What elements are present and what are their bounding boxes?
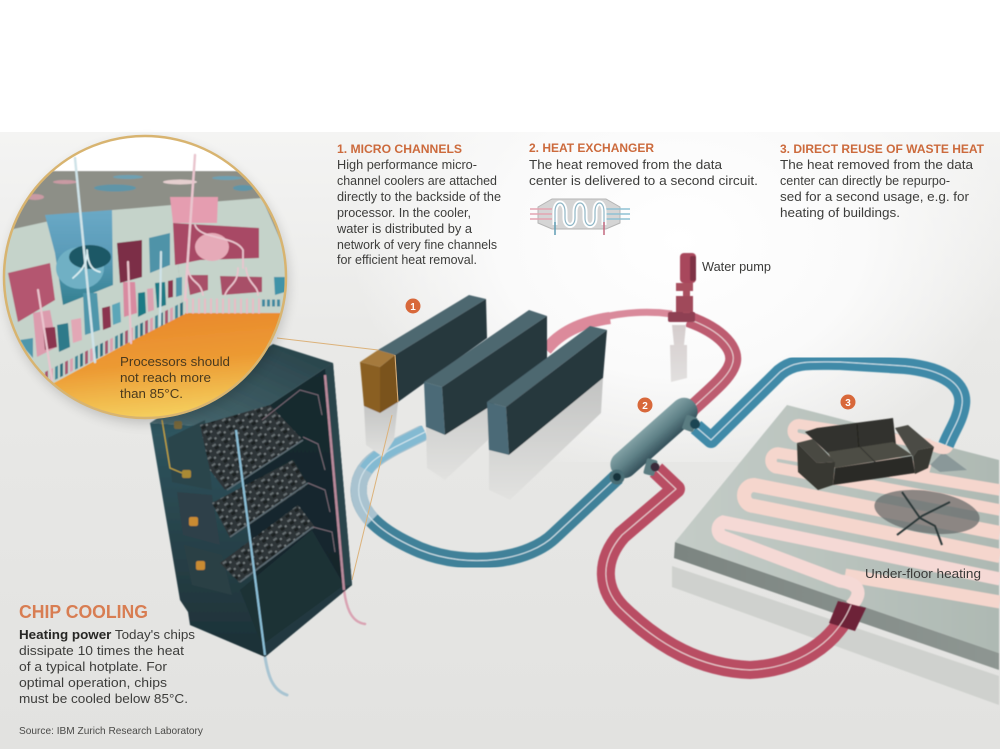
marker 2: 2 — [642, 401, 648, 412]
callout: processors temperature: than 85°C. — [120, 386, 183, 401]
intro text block: must be cooled below 85°C. — [19, 691, 188, 706]
section 1: micro channels text — [336, 142, 501, 267]
heat exchanger — [605, 392, 703, 484]
under-floor heating slab — [672, 405, 1000, 705]
section 3: direct reuse text: sed for a second usage, e.g. for — [780, 190, 969, 204]
title: CHIP COOLING — [19, 602, 148, 622]
highlighted brown cooler — [360, 350, 398, 413]
section 1: micro channels text: High performance micro- — [337, 158, 477, 172]
intro text block: Heating power Today's chips — [19, 627, 196, 642]
red pipe: exchanger to floor — [606, 470, 866, 670]
marker 1 — [406, 298, 420, 314]
section 2: heat exchanger text: 2. HEAT EXCHANGER — [529, 141, 654, 155]
marker 2 — [638, 398, 652, 412]
marker 3 — [840, 394, 856, 410]
rack coolant pipes — [325, 375, 344, 590]
intro text block: dissipate 10 times the heat — [19, 643, 184, 658]
blue chamber — [45, 210, 113, 335]
marker 1: 1 — [410, 302, 416, 313]
section 3: direct reuse text: center can directly be repurpo- — [780, 174, 950, 188]
shelves with heat sinks — [200, 390, 335, 583]
section 3: direct reuse text: 3. DIRECT REUSE OF WASTE HEAT — [780, 142, 985, 156]
circuit boards and chips — [162, 420, 232, 595]
micro channel cooler blocks — [360, 295, 607, 500]
icon: heat exchanger diagram — [530, 199, 630, 235]
pink chambers — [8, 197, 262, 357]
processor floor — [54, 312, 280, 417]
section 3: direct reuse text — [780, 142, 985, 220]
server rack — [150, 344, 365, 695]
blue pipe: heat exchanger to floor — [696, 362, 962, 445]
label: under-floor heating: Under-floor heating — [865, 567, 981, 581]
rack outflow pipes — [265, 590, 365, 695]
walls — [5, 204, 182, 384]
water pump — [668, 253, 696, 382]
section 1: micro channels text: channel coolers are attached — [337, 174, 497, 188]
sofa — [797, 418, 934, 490]
callout: processors temperature — [120, 354, 230, 401]
zoom connector lines — [277, 338, 398, 580]
coolant tubes — [38, 155, 258, 380]
callout: processors temperature: not reach more — [120, 370, 211, 385]
intro text block — [19, 627, 196, 706]
marker 3: 3 — [845, 398, 851, 409]
section 2: heat exchanger text: center is delivered to a second circuit. — [529, 174, 758, 188]
sofa and table — [797, 418, 982, 545]
section 3: direct reuse text: heating of buildings. — [780, 206, 900, 220]
section 1: micro channels text: for efficient heat removal. — [337, 253, 477, 267]
section 3: direct reuse text: The heat removed from the data — [780, 158, 973, 172]
intro text block: optimal operation, chips — [19, 675, 168, 690]
floor heating coil — [718, 424, 1000, 606]
section 2: heat exchanger text: The heat removed from the data — [529, 158, 722, 172]
intro text block: of a typical hotplate. For — [19, 659, 168, 674]
section 1: micro channels text: directly to the backside of the — [337, 190, 501, 204]
section 1: micro channels text: processor. In the cooler, — [337, 206, 471, 220]
source note: Source: IBM Zurich Research Laboratory — [19, 725, 204, 737]
section 1: micro channels text: 1. MICRO CHANNELS — [337, 142, 462, 156]
section 1: micro channels text: water is distributed by a — [336, 222, 472, 236]
blue pipe: rack loop to heat exchanger — [359, 432, 617, 561]
red pipe: pump to exchanger and chillers — [546, 312, 733, 412]
blue side chambers — [20, 233, 285, 358]
micro channels, right wall — [186, 303, 280, 306]
callout: processors temperature: Processors should — [120, 354, 230, 369]
micro channel row, left wall — [45, 301, 185, 385]
section 1: micro channels text: network of very fine channels — [337, 238, 497, 252]
coffee table — [872, 484, 982, 545]
label: water pump: Water pump — [702, 260, 771, 274]
magnified processor view — [0, 130, 290, 425]
section 2: heat exchanger text — [529, 141, 758, 188]
